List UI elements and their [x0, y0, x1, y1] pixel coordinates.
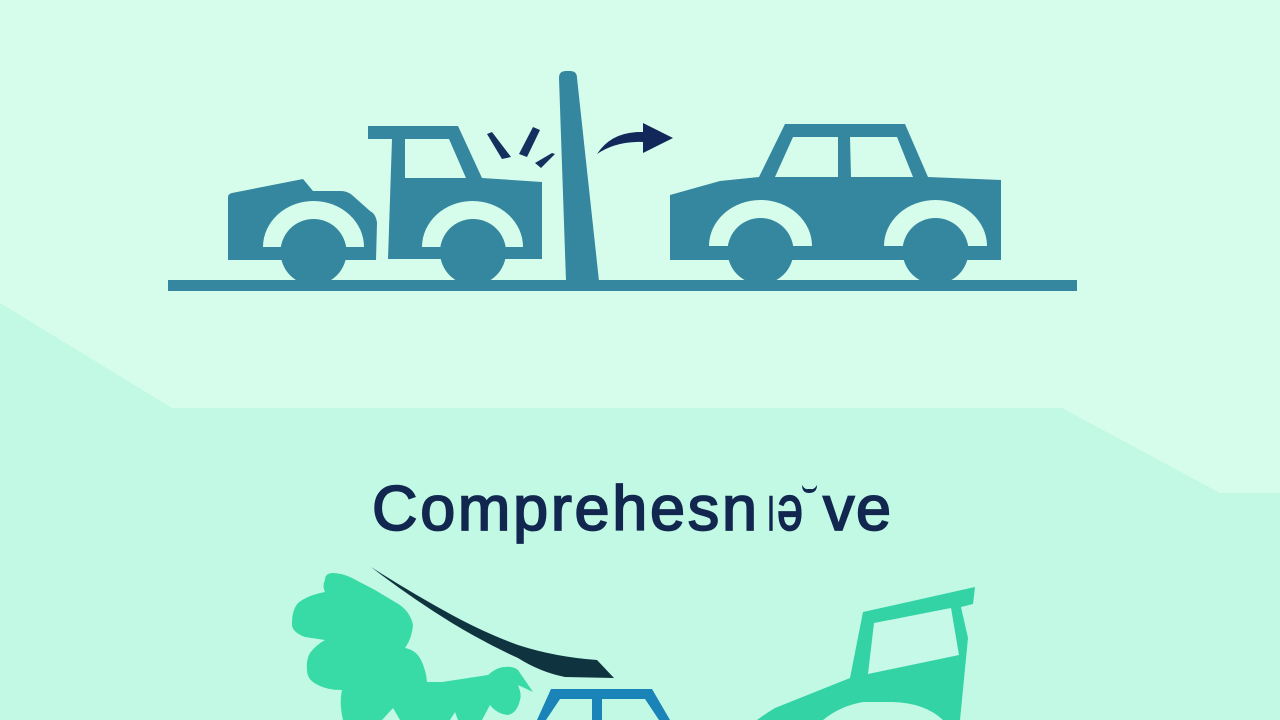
- title: Comprehesn: [372, 474, 757, 544]
- green vehicle: [757, 587, 975, 720]
- title: ı: [767, 474, 775, 544]
- arrow: [597, 123, 673, 154]
- pole: [559, 71, 599, 281]
- title: ve: [823, 474, 891, 544]
- blue car roof: [537, 689, 670, 720]
- intact car: [670, 124, 1001, 284]
- illustration: comprehensive coverage scene: [292, 567, 975, 720]
- damaged car: rear section: [228, 179, 377, 285]
- road line: [168, 280, 1077, 291]
- impact sparks: [487, 127, 555, 168]
- title: ə: [777, 474, 803, 544]
- illustration: collision scene: [168, 71, 1077, 291]
- dark swoosh: [371, 567, 614, 678]
- damaged car: front cab section: [368, 126, 542, 285]
- green tree: [292, 573, 533, 720]
